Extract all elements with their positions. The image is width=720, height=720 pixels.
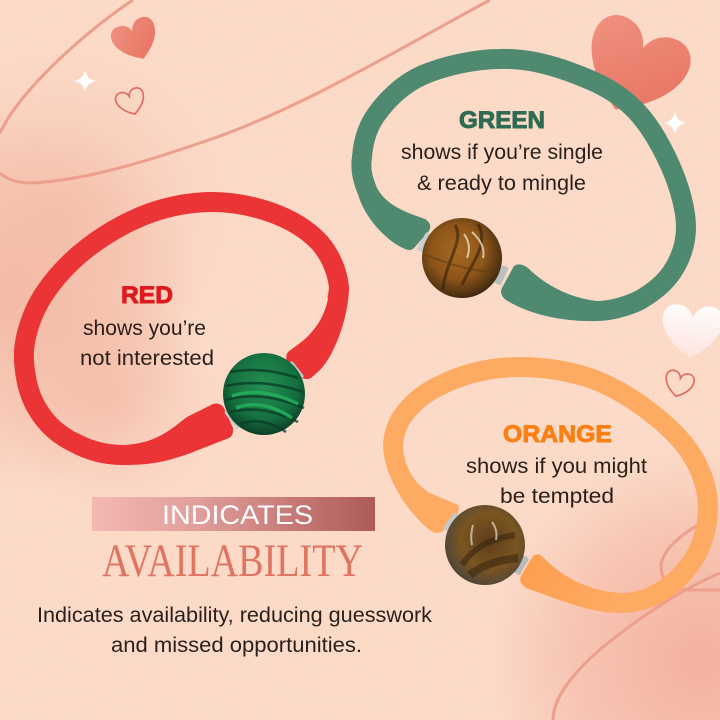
heading: availability: AVAILABILITY — [102, 535, 363, 587]
label: green: GREEN — [459, 107, 545, 134]
icon: white heart — [660, 303, 720, 360]
icon: sparkle left — [74, 70, 96, 92]
bead: malachite — [223, 353, 305, 435]
description text: Indicates availability, reducing guesswork — [37, 603, 432, 627]
icon: outline heart top left — [114, 86, 148, 118]
bead: tiger eye — [445, 505, 525, 585]
heading bar: indicates — [92, 497, 375, 531]
label: red: RED — [121, 282, 173, 309]
label: green: shows if you’re single — [401, 140, 603, 164]
label: orange — [466, 421, 647, 508]
description text: and missed opportunities. — [111, 633, 362, 657]
orange bracelet — [383, 367, 708, 613]
label: green: & ready to mingle — [417, 171, 586, 195]
label: orange: be tempted — [500, 484, 614, 508]
red bracelet — [24, 202, 349, 465]
icon: large red heart — [569, 8, 698, 130]
label: orange: shows if you might — [466, 454, 647, 478]
icon: sparkle right — [664, 112, 686, 134]
heading bar: indicates: INDICATES — [162, 500, 313, 530]
description text — [37, 603, 432, 657]
label: red: not interested — [80, 346, 214, 370]
icon: small red heart — [108, 14, 165, 67]
label: red — [80, 282, 214, 370]
label: green — [401, 107, 603, 195]
label: orange: ORANGE — [503, 421, 612, 448]
green bracelet — [357, 59, 686, 321]
bead: tiger eye — [422, 218, 502, 298]
icon: outline heart right — [662, 369, 696, 400]
label: red: shows you’re — [83, 316, 206, 340]
